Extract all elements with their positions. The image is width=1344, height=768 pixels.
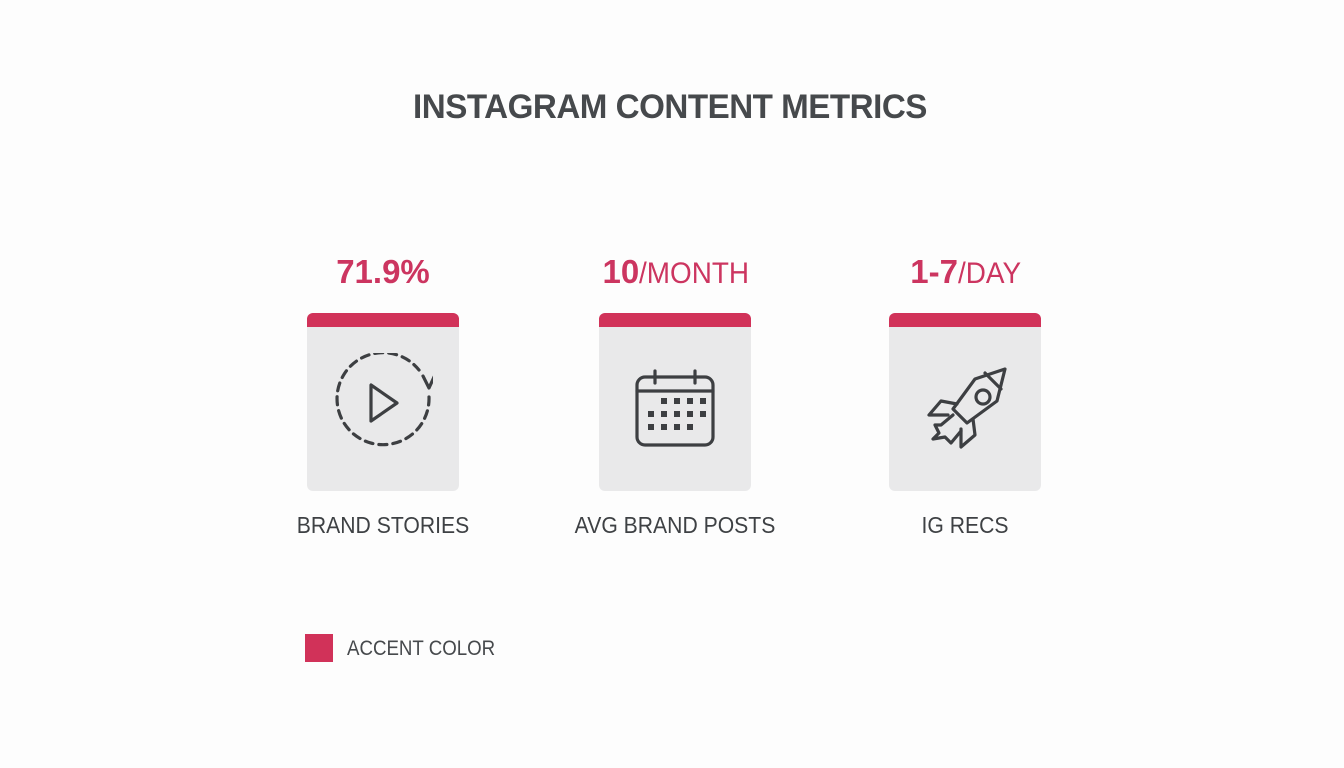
value: ig recs: 1-7 (910, 253, 958, 290)
legend (305, 634, 495, 662)
value: ig recs: /DAY (958, 257, 1021, 290)
value: ig recs (910, 253, 1021, 290)
card: brand stories (307, 313, 459, 491)
title: INSTAGRAM CONTENT METRICS (413, 88, 927, 126)
value: avg brand posts: 10 (602, 253, 639, 290)
icon: rocket (927, 367, 1007, 449)
legend swatch (305, 634, 333, 662)
icon: dashed circle play (335, 353, 433, 446)
legend text: ACCENT COLOR (347, 637, 495, 660)
label: brand stories: BRAND STORIES (297, 512, 469, 538)
label: ig recs: IG RECS (921, 512, 1008, 538)
icon: calendar (635, 369, 715, 447)
label: avg brand posts: AVG BRAND POSTS (575, 512, 775, 538)
card: avg brand posts (599, 313, 751, 491)
value: brand stories: 71.9% (336, 253, 430, 290)
card: ig recs (889, 313, 1041, 491)
value: avg brand posts (602, 253, 749, 290)
value: avg brand posts: /MONTH (639, 257, 749, 290)
